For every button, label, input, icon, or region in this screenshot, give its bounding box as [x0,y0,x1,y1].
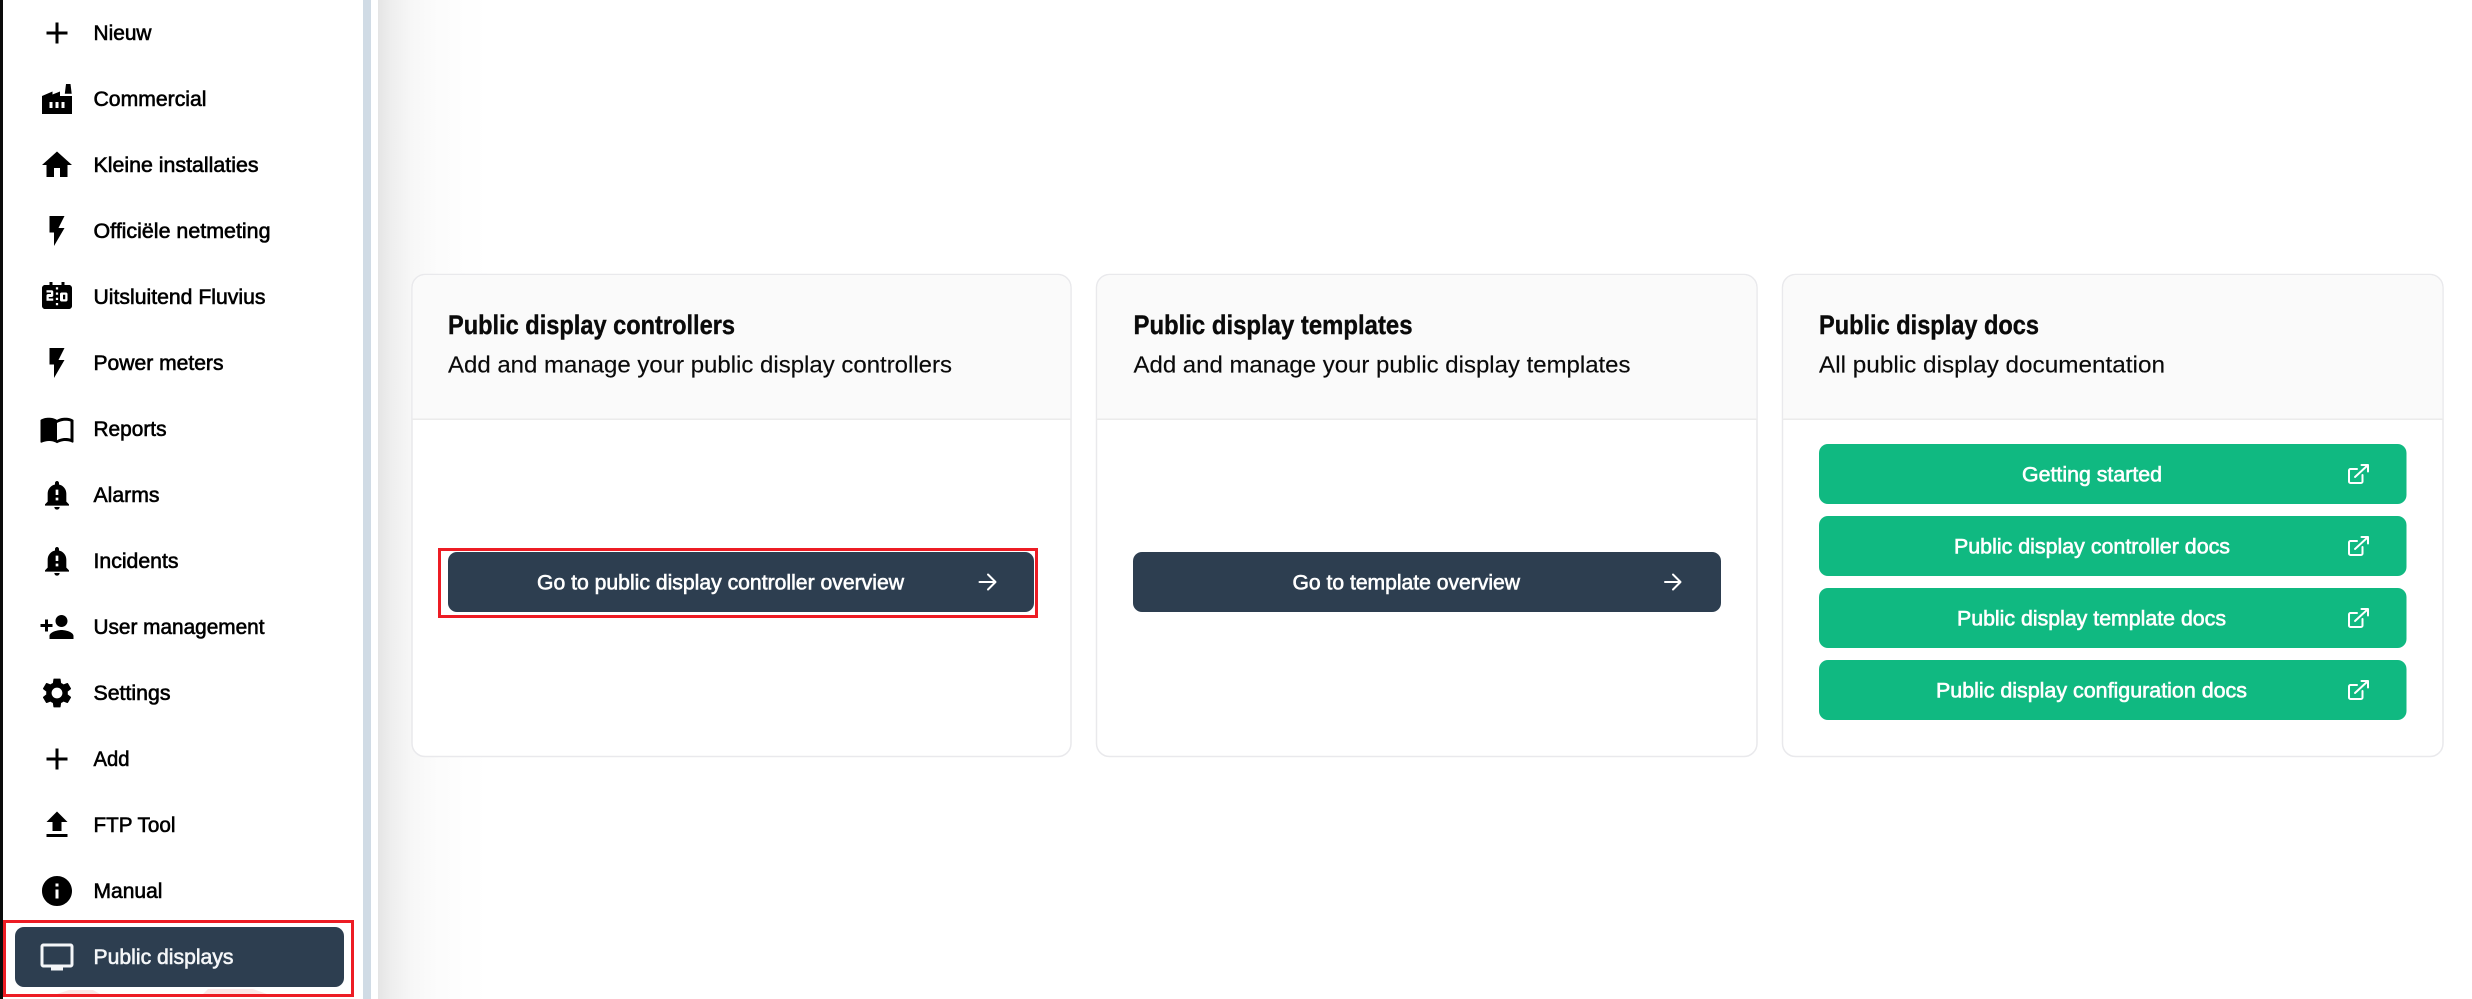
main area shadow [378,0,488,999]
nav item: Nieuw: Nieuw [94,22,152,45]
nav item: Power meters [50,348,224,378]
nav item: Public displays (active) [15,927,344,987]
nav item: Manual: Manual [94,880,162,903]
nav item: Commercial: Commercial [94,88,206,111]
header divider [1782,418,2443,420]
button: Public display configuration docs [1819,660,2406,720]
card body [412,274,1071,756]
nav item: Manual [42,876,162,906]
nav item: FTP Tool: FTP Tool [94,814,176,837]
sidebar scrollbar strip [363,0,371,999]
nav item: Add: Add [94,748,130,771]
panel: Public display docs [1782,274,2443,756]
nav item: Alarms: Alarms [94,484,160,507]
nav item: Incidents: Incidents [94,550,178,573]
nav item: Power meters: Power meters [94,352,224,375]
heading: Public display docs [1819,310,2039,340]
nav item: Officiële netmeting: Officiële netmeting [94,220,270,243]
button: Getting started [1819,444,2406,504]
card body [1096,274,1757,756]
subtitle: All public display documentation [1819,352,2165,378]
button: Public display template docs: Public display template docs [1957,608,2226,630]
nav item: Reports: Reports [94,418,166,441]
button: controller overview [448,552,1034,612]
nav item: Incidents [45,547,179,576]
card body [1782,274,2443,756]
button: template overview [1133,552,1721,612]
subtitle: Add and manage your public display templates [1134,352,1630,378]
red highlight around button [440,550,1036,616]
button: Public display controller docs: Public display controller docs [1954,536,2230,558]
nav item: Commercial [42,84,206,114]
panel: Public display templates [1096,274,1757,756]
nav item: Uitsluitend Fluvius [42,282,266,309]
heading: Public display templates [1134,310,1412,340]
card header [413,275,1070,419]
card header [1097,275,1756,419]
nav item: Kleine installaties [42,152,258,177]
nav item: Public displays (active): Public displays [94,946,234,969]
nav item: Add [46,748,130,771]
nav item: User management: User management [94,616,265,639]
button: template overview: Go to template overview [1292,572,1521,594]
header divider [1096,418,1757,420]
heading: Public display controllers [448,310,735,340]
nav item: FTP Tool [46,812,176,837]
button: Getting started: Getting started [2022,464,2162,486]
header divider [412,418,1071,420]
nav item: Kleine installaties: Kleine installaties [94,154,258,177]
nav item: Reports [40,418,166,443]
sidebar [0,0,371,999]
nav item: Nieuw [46,22,152,45]
nav item: Alarms [45,481,160,510]
faint item behind highlight [57,989,267,994]
red highlight around Public displays [4,922,352,996]
subtitle: Add and manage your public display controllers [448,352,952,378]
sidebar background [0,0,363,999]
panel: Public display controllers [412,274,1071,756]
button: Public display controller docs [1819,516,2406,576]
nav item: Settings [43,679,171,707]
sidebar left edge [0,0,3,999]
nav item: Officiële netmeting [50,216,270,246]
card header [1783,275,2442,419]
nav item: Uitsluitend Fluvius: Uitsluitend Fluvius [94,286,266,309]
button: controller overview: Go to public display controller overview [537,572,905,594]
nav item: Settings: Settings [94,682,170,705]
button: Public display configuration docs: Public display configuration docs [1936,680,2247,702]
button: Public display template docs [1819,588,2406,648]
